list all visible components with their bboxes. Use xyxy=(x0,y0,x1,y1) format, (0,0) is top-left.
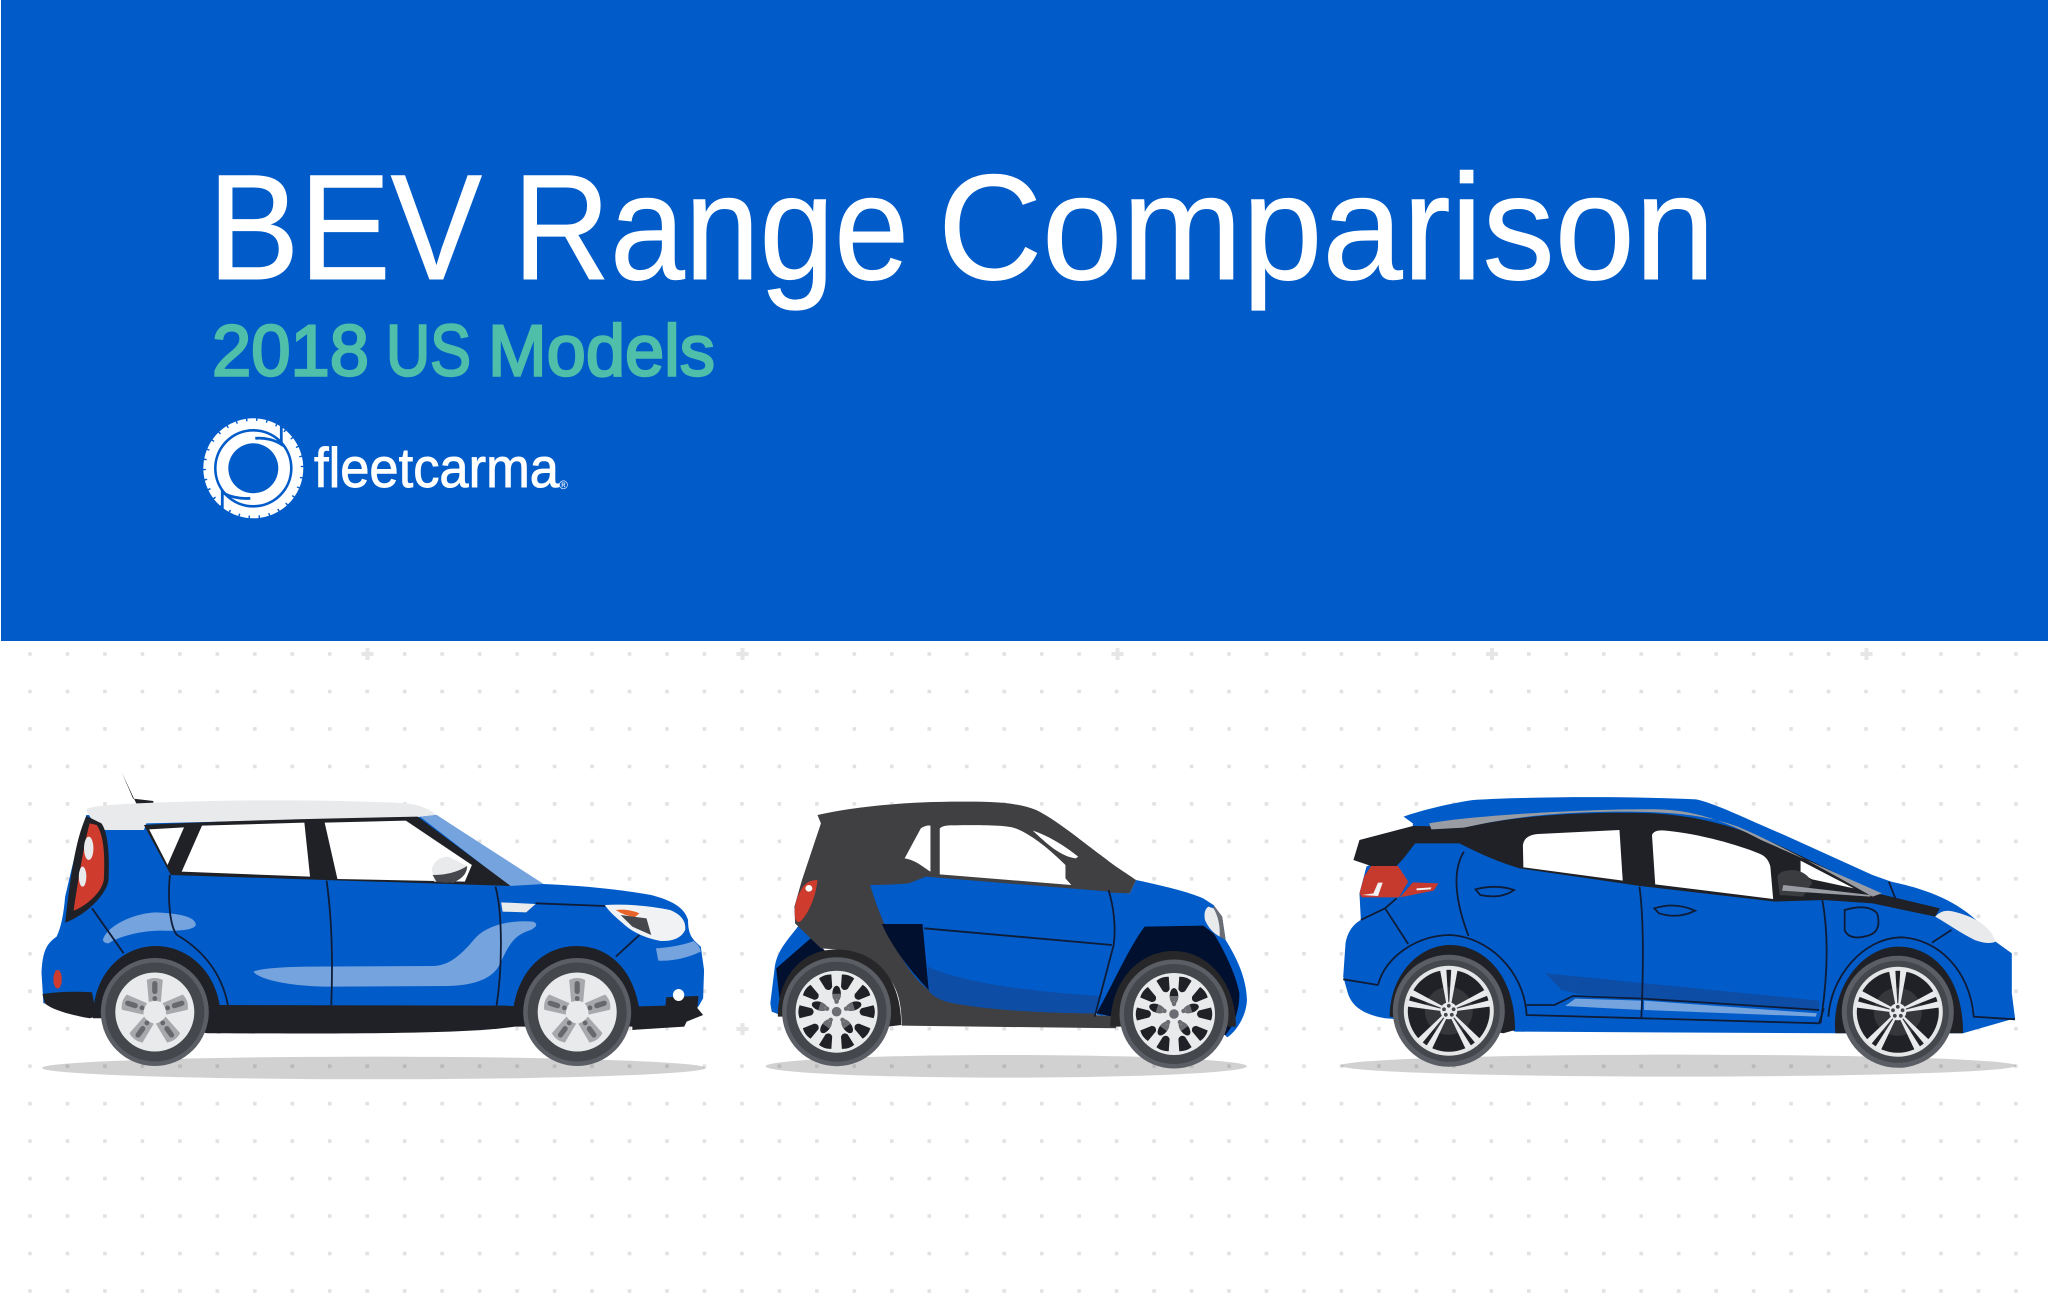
head light xyxy=(1205,905,1226,940)
title: Range xyxy=(513,143,909,311)
tail light xyxy=(65,816,109,923)
mirror xyxy=(432,857,467,883)
header band xyxy=(1,0,2048,641)
quarter window xyxy=(1801,861,1854,888)
front window xyxy=(940,825,1071,885)
body xyxy=(1343,797,2015,1033)
wheel arches xyxy=(1390,945,1963,1033)
windshield tint xyxy=(420,815,544,886)
rear reflector xyxy=(53,970,62,989)
rear wheel xyxy=(1393,955,1505,1067)
silver trim xyxy=(1429,809,1882,897)
window frame xyxy=(144,817,511,886)
mirror xyxy=(1777,870,1870,897)
ground shadow xyxy=(42,1057,705,1079)
white roof xyxy=(86,800,437,830)
front arch shadow xyxy=(1096,926,1239,1035)
body xyxy=(770,802,1247,1037)
body xyxy=(42,772,704,1034)
tail light xyxy=(795,880,817,922)
car: smart fortwo xyxy=(765,802,1247,1078)
front window xyxy=(1652,830,1773,899)
title: BEV xyxy=(208,143,482,311)
door handle trim xyxy=(501,902,536,912)
lower trim xyxy=(42,946,703,1034)
lower door shade xyxy=(1545,973,1819,1009)
icon: tire xyxy=(205,420,301,516)
head light xyxy=(1935,911,1996,943)
front wheel xyxy=(1842,956,1954,1068)
panel lines xyxy=(1343,852,2015,1023)
rear fender xyxy=(770,923,843,1016)
registered mark: ® xyxy=(559,478,568,492)
title xyxy=(208,143,1715,311)
grey tridion shell xyxy=(794,802,1136,1028)
arch rings xyxy=(778,949,1236,1027)
car: Chevrolet Bolt xyxy=(1340,797,2016,1077)
rear window xyxy=(1523,830,1623,881)
car: Kia Soul EV xyxy=(42,772,705,1079)
door xyxy=(870,877,1114,1013)
door lower shade xyxy=(928,967,1100,1013)
front window xyxy=(325,821,472,882)
subtitle: Models xyxy=(488,312,715,392)
subtitle xyxy=(212,312,715,392)
title: Comparison xyxy=(938,143,1715,311)
blue shell xyxy=(42,815,704,1007)
front wheel xyxy=(523,958,631,1066)
tail light xyxy=(1359,866,1438,897)
fog light xyxy=(673,989,684,1001)
ground shadow xyxy=(1340,1055,2016,1077)
subtitle: US xyxy=(386,312,471,392)
fleetcarma logo xyxy=(205,420,568,516)
ground shadow xyxy=(765,1055,1247,1078)
dotted background grid xyxy=(0,641,2048,1304)
rear wheel xyxy=(101,958,209,1066)
antenna xyxy=(122,772,153,805)
quarter window xyxy=(149,827,184,865)
rear wheel xyxy=(782,957,891,1066)
blue shell xyxy=(1343,797,2015,1033)
front wheel xyxy=(1120,960,1228,1068)
subtitle: 2018 xyxy=(212,312,369,392)
head light xyxy=(605,905,685,941)
wordmark: fleetcarma xyxy=(314,436,560,499)
rear arch shadow xyxy=(776,938,902,1025)
panel lines xyxy=(92,875,639,1007)
rear window xyxy=(182,823,310,877)
sill highlights xyxy=(1565,999,1817,1017)
front fender xyxy=(1096,880,1247,1037)
windshield sliver xyxy=(1033,831,1078,858)
body highlights xyxy=(103,912,701,987)
rear window xyxy=(905,826,930,872)
black roof band xyxy=(1353,813,1940,917)
door lines xyxy=(924,890,1115,1017)
side panel xyxy=(882,924,929,990)
